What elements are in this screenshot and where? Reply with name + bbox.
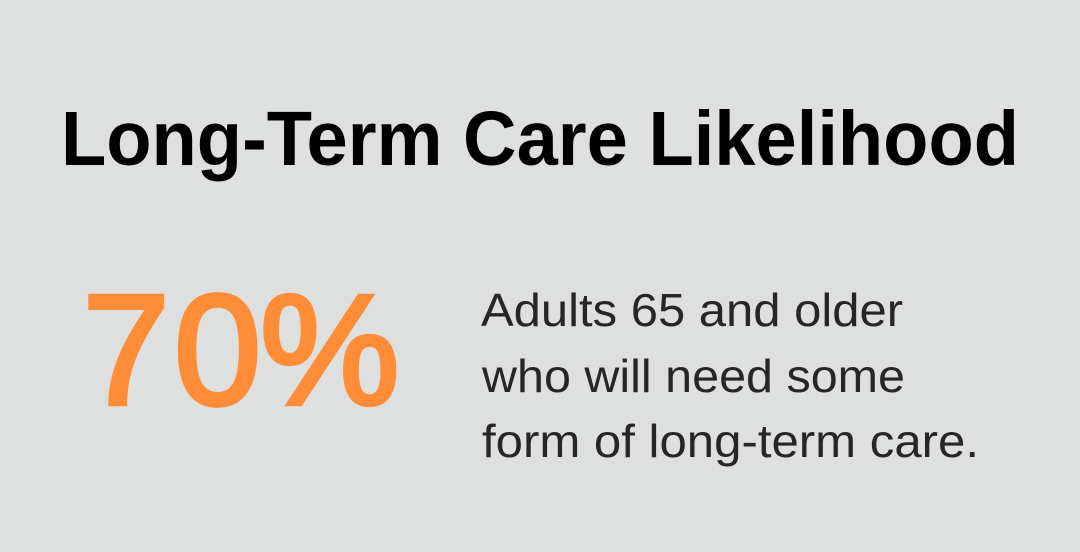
description text: who will need some [481,350,905,402]
description text [481,284,979,467]
description text: Adults 65 and older [481,284,903,336]
description text: form of long-term care. [482,415,979,467]
title: Long-Term Care Likelihood [61,96,1019,182]
statistic: 70%: 70% [82,263,400,438]
